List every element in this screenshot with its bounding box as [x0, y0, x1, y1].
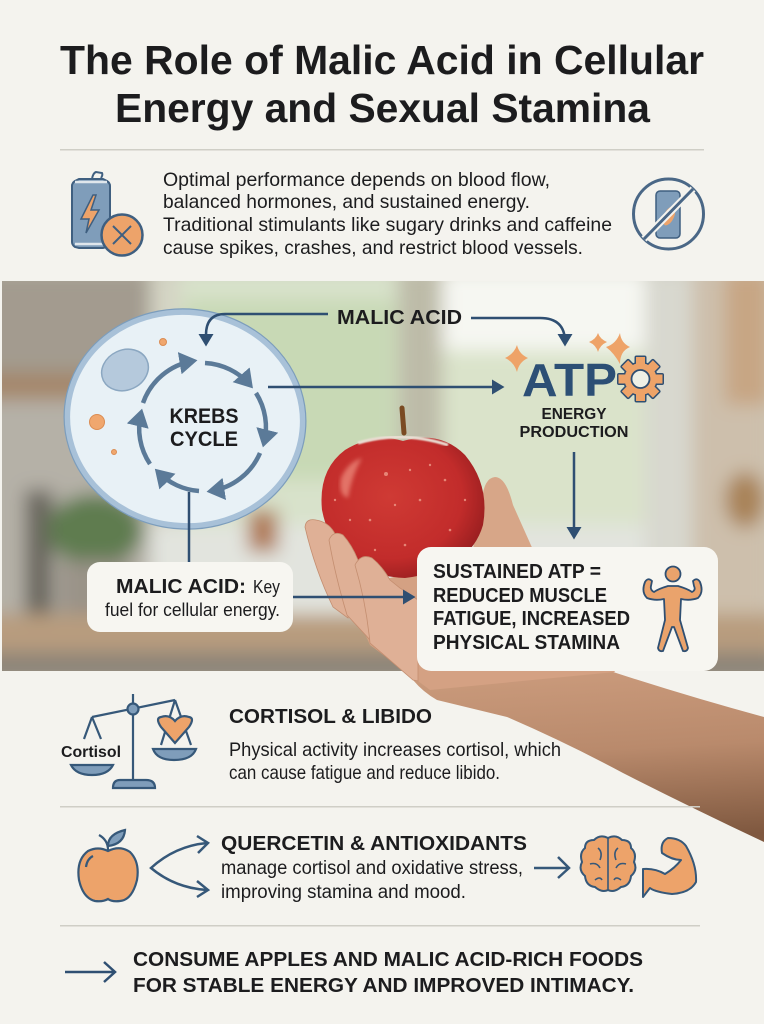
- icon: apple: [78, 830, 138, 901]
- callout: malic acid fuel: MALIC ACID:: [116, 576, 246, 598]
- callout: malic acid fuel: Key: [253, 577, 280, 597]
- cortisol label: Cortisol: [61, 744, 121, 761]
- branching arrows: [151, 836, 208, 897]
- intro text: balanced hormones, and sustained energy.: [163, 191, 530, 213]
- body: can cause fatigue and reduce libido.: [229, 762, 500, 784]
- Krebs label: KREBS: [170, 405, 238, 428]
- callout: sustained ATP: [417, 547, 718, 671]
- body: Physical activity increases cortisol, which: [229, 739, 561, 761]
- title: The Role of Malic Acid in Cellular: [60, 37, 704, 83]
- apple: [321, 408, 485, 578]
- body: [229, 739, 561, 784]
- callout: sustained ATP: FATIGUE, INCREASED: [433, 608, 630, 630]
- icon: prohibited can: [634, 179, 704, 249]
- intro text: Optimal performance depends on blood flow,: [163, 169, 550, 191]
- thumb: [470, 477, 534, 565]
- arrow: [65, 962, 115, 982]
- ATP label: ENERGY: [542, 406, 607, 423]
- callout: sustained ATP: REDUCED MUSCLE: [433, 585, 607, 607]
- arrow to brain: [534, 857, 569, 878]
- speckles: [334, 464, 466, 551]
- organelle: [95, 342, 155, 398]
- intro text: Traditional stimulants like sugary drinks and caffeine: [163, 214, 612, 236]
- ATP label: ATP: [522, 354, 617, 406]
- section: quercetin and antioxidants: [78, 830, 696, 903]
- section: cortisol and libido: [61, 694, 561, 788]
- call to action: FOR STABLE ENERGY AND IMPROVED INTIMACY.: [133, 975, 634, 997]
- call to action: [65, 949, 643, 997]
- icon: balance scale: [71, 694, 196, 788]
- callout: sustained ATP: SUSTAINED ATP =: [433, 561, 601, 583]
- icon: sparkles: [505, 333, 630, 372]
- icon: strong person: [643, 566, 702, 651]
- malic acid label: MALIC ACID: [337, 307, 462, 329]
- cell diagram with Krebs cycle: [53, 297, 317, 541]
- title: [60, 37, 704, 131]
- intro text: cause spikes, crashes, and restrict blood vessels.: [163, 237, 583, 259]
- icon: gear: [617, 356, 664, 402]
- forearm and hand: [345, 477, 764, 842]
- body: manage cortisol and oxidative stress,: [221, 858, 523, 879]
- body: improving stamina and mood.: [221, 882, 466, 903]
- ATP label: PRODUCTION: [520, 424, 628, 441]
- intro text: [163, 169, 612, 259]
- title: Energy and Sexual Stamina: [115, 85, 651, 131]
- call to action text: CONSUME APPLES AND MALIC ACID-RICH FOODS: [133, 949, 643, 971]
- ATP label: [520, 354, 628, 441]
- cell membrane: [56, 300, 314, 538]
- cycle arrows: [139, 361, 266, 491]
- orange dots: [90, 338, 166, 454]
- icon: brain: [581, 836, 635, 891]
- heading: CORTISOL & LIBIDO: [229, 706, 432, 728]
- heading: QUERCETIN & ANTIOXIDANTS: [221, 833, 527, 855]
- icon: flexed arm: [643, 838, 696, 897]
- callout: sustained ATP: PHYSICAL STAMINA: [433, 632, 620, 654]
- Krebs label: CYCLE: [170, 428, 238, 451]
- photo panel: blurred kitchen background: [0, 270, 764, 682]
- hand fingers: [305, 520, 418, 681]
- palm: [345, 552, 615, 690]
- body: [221, 858, 523, 903]
- icon: energy drink can with X: [72, 172, 142, 256]
- arrows: malic acid to cell and ATP: [189, 314, 574, 597]
- callout: malic acid fuel: [87, 562, 293, 632]
- Krebs label: [170, 405, 238, 451]
- callout: malic acid fuel: fuel for cellular energy.: [105, 599, 280, 620]
